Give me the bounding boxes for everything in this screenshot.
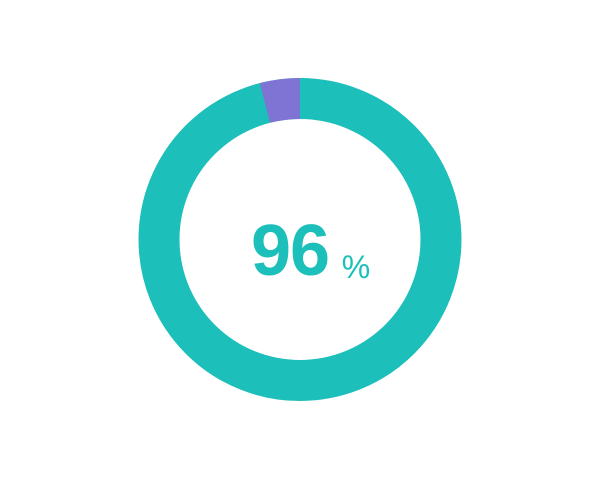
- center label: 96%: 96: [251, 211, 329, 291]
- ring: teal 96%: [159, 98, 441, 380]
- center label: 96%: %: [342, 249, 370, 285]
- center label: 96%: [251, 211, 370, 291]
- ring segment: purple 4%: [128, 68, 472, 411]
